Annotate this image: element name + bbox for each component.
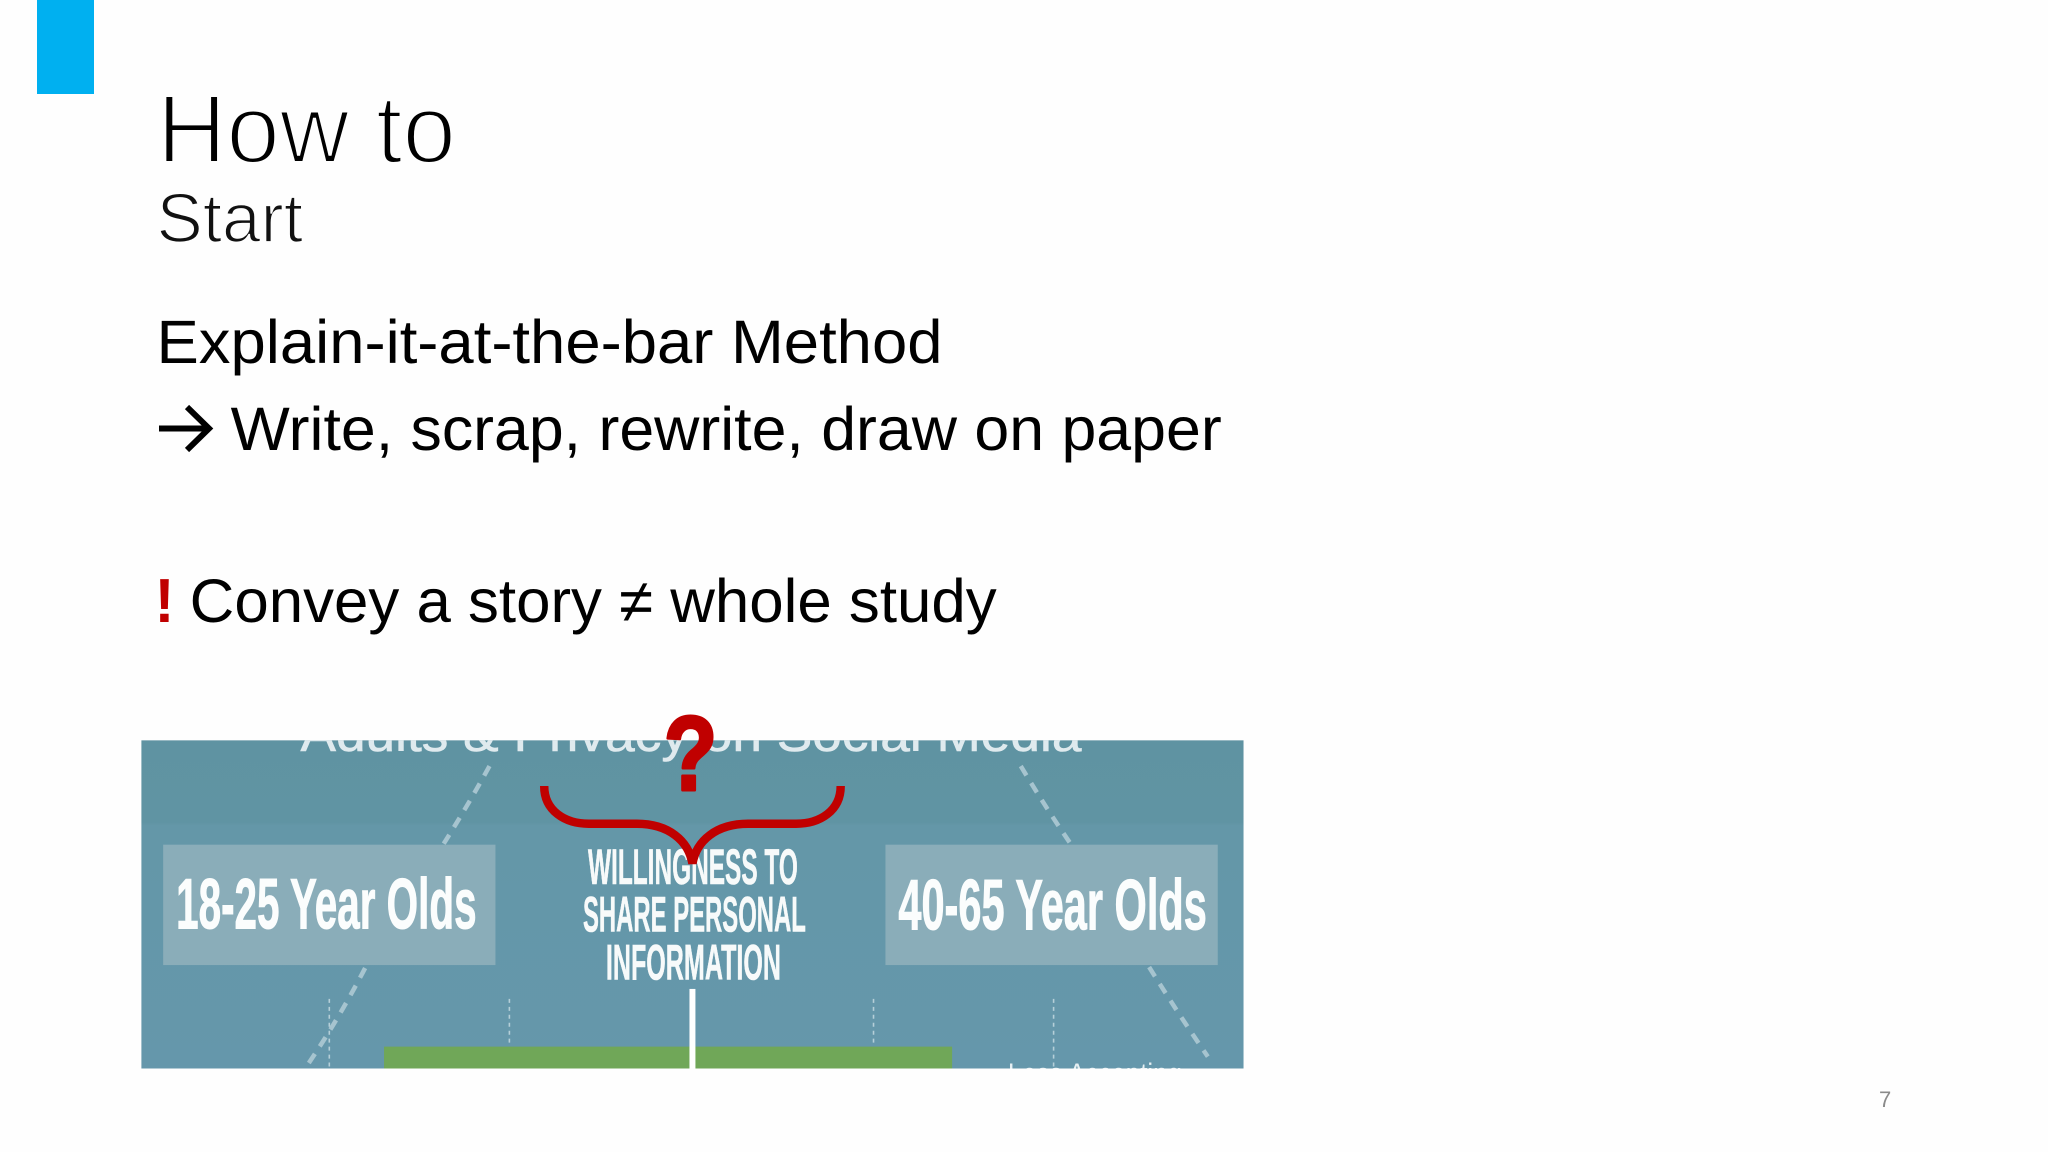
panel: infographic excerpt: SHARE PERSONAL bbox=[583, 887, 806, 943]
center label: willingness to share personal information: INFORMATION bbox=[606, 934, 781, 990]
annotation: red brace bbox=[544, 786, 841, 864]
title: Start bbox=[156, 179, 303, 257]
panel: infographic excerpt bbox=[141, 696, 1244, 1088]
cropped label: less accepting: Less Accepting bbox=[1008, 1057, 1182, 1088]
icon: arrow bbox=[159, 407, 209, 450]
accent tab bbox=[37, 0, 94, 94]
label box: 18-25 year olds bbox=[163, 845, 495, 965]
annotation: red question mark: ? bbox=[664, 696, 717, 813]
label box: 40-65 year olds bbox=[885, 845, 1218, 965]
icon: exclamation mark: ! bbox=[154, 567, 174, 636]
center axis line bbox=[689, 989, 695, 1069]
center label: willingness to share personal information: WILLINGNESS TO bbox=[588, 839, 798, 895]
text block: method: Explain-it-at-the-bar Method bbox=[156, 308, 942, 376]
label box: 18-25 year olds: 18-25 Year Olds bbox=[176, 865, 477, 945]
thin dashed guide lines bbox=[329, 999, 1054, 1069]
title bbox=[156, 74, 456, 257]
green bar bbox=[384, 1047, 952, 1069]
label box: 40-65 year olds: 40-65 Year Olds bbox=[898, 866, 1207, 946]
title: How to bbox=[157, 74, 456, 184]
center label: willingness to share personal information bbox=[584, 848, 806, 980]
text block: convey a story: Convey a story ≠ whole study bbox=[190, 567, 997, 635]
page number: 7 bbox=[1879, 1087, 1891, 1112]
text block: write on paper: Write, scrap, rewrite, draw on paper bbox=[231, 395, 1222, 463]
dashed curves bbox=[306, 766, 1208, 1067]
infographic title: Adults & Privacy on Social Media bbox=[300, 706, 1082, 762]
